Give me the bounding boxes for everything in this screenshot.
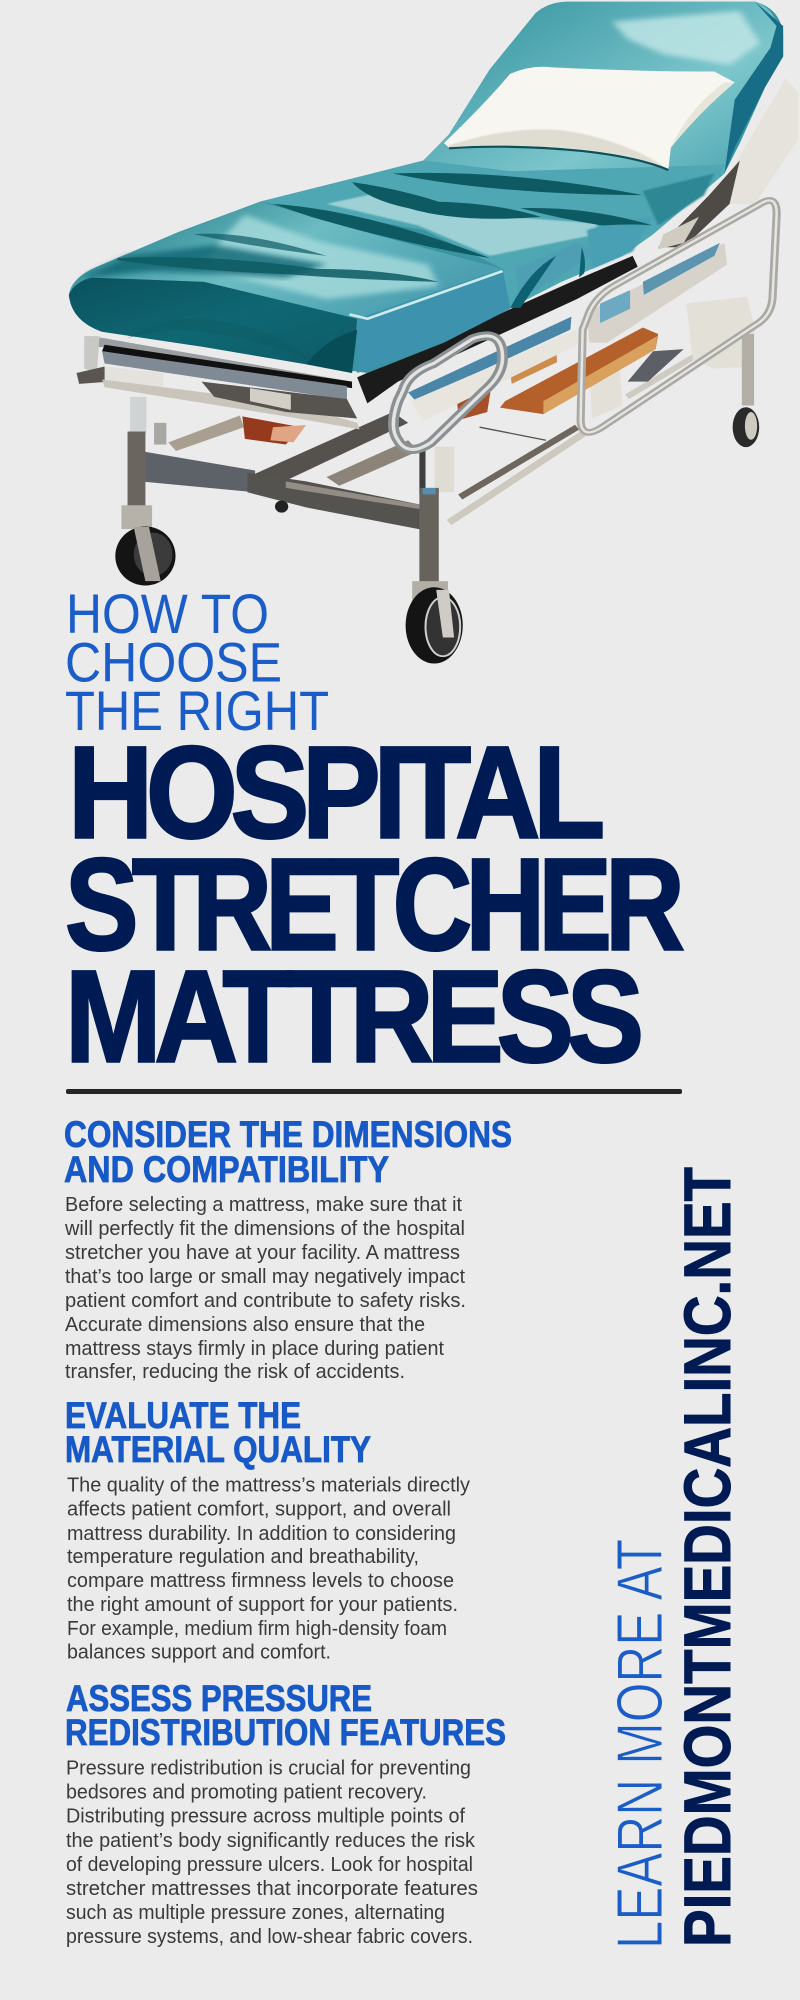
section: consider the dimensions xyxy=(64,1114,512,1383)
title: hospital stretcher mattress xyxy=(65,718,683,1090)
mattress foot front face xyxy=(69,278,357,373)
title: hospital stretcher mattress: MATTRESS xyxy=(65,942,640,1090)
mattress base silhouette xyxy=(69,2,783,373)
mattress folds xyxy=(117,173,653,373)
mattress foot highlight xyxy=(199,215,439,299)
title: how to choose the right: THE RIGHT xyxy=(65,679,329,742)
body text: assess pressure redistribution: Pressure redistribution is crucial for preventing xyxy=(66,1758,471,1780)
divider line xyxy=(66,1089,682,1094)
body text: consider the dimensions: Before selecting a mattress, make sure that it xyxy=(65,1194,462,1216)
body text: evaluate the material quality: temperature regulation and breathability, xyxy=(67,1546,419,1568)
body text: consider the dimensions: Accurate dimensions also ensure that the xyxy=(65,1314,425,1336)
body text: assess pressure redistribution: stretcher mattresses that incorporate features xyxy=(66,1878,478,1900)
heading: assess pressure redistribution xyxy=(65,1678,506,1753)
heading: consider the dimensions: CONSIDER THE DIMENSIONS xyxy=(64,1114,512,1155)
wooden support blocks xyxy=(242,327,658,445)
body text: consider the dimensions xyxy=(64,1194,466,1383)
vertical call to action: learn more at: LEARN MORE AT xyxy=(603,1539,676,1949)
mattress head side edge xyxy=(724,2,783,173)
heading: evaluate the material quality xyxy=(65,1395,371,1470)
body text: assess pressure redistribution: pressure systems, and low-shear fabric covers. xyxy=(66,1926,473,1948)
heading: consider the dimensions xyxy=(64,1114,512,1190)
section: evaluate the material quality xyxy=(65,1395,470,1664)
body text: assess pressure redistribution: such as multiple pressure zones, alternating xyxy=(66,1902,445,1924)
deck rails under mattress xyxy=(77,78,798,429)
heading: consider the dimensions: AND COMPATIBILITY xyxy=(64,1149,389,1190)
body text: evaluate the material quality: mattress durability. In addition to considering xyxy=(67,1523,456,1545)
section: assess pressure redistribution xyxy=(65,1678,506,1948)
front left leg and wheel xyxy=(115,397,176,585)
body text: evaluate the material quality: The quality of the mattress’s materials directly xyxy=(67,1474,470,1496)
body text: consider the dimensions: stretcher you have at your facility. A mattress xyxy=(65,1242,460,1264)
body text: consider the dimensions: transfer, reducing the risk of accidents. xyxy=(65,1361,405,1383)
stretcher base frame and beams xyxy=(140,297,755,530)
front centre leg and wheel xyxy=(406,447,463,664)
body text: assess pressure redistribution: of developing pressure ulcers. Look for hospital xyxy=(66,1854,473,1876)
body text: evaluate the material quality: For example, medium firm high-density foam xyxy=(67,1618,447,1640)
vertical call to action: website: PIEDMONTMEDICALINC.NET xyxy=(670,1167,744,1947)
body text: evaluate the material quality: the right amount of support for your patients. xyxy=(67,1594,458,1616)
heading: evaluate the material quality: EVALUATE THE xyxy=(65,1395,301,1436)
title: hospital stretcher mattress: STRETCHER xyxy=(65,830,683,978)
mattress middle section xyxy=(260,160,724,308)
mattress edge highlight xyxy=(349,271,503,319)
title: how to choose the right xyxy=(65,582,329,742)
body text: consider the dimensions: that’s too large or small may negatively impact xyxy=(65,1266,465,1288)
mattress foot dark shading xyxy=(82,245,327,278)
title: how to choose the right: CHOOSE xyxy=(65,630,282,694)
mattress middle highlights xyxy=(327,173,714,299)
body text: assess pressure redistribution: Distributing pressure across multiple points of xyxy=(66,1806,465,1828)
rear side guard rail xyxy=(581,200,777,432)
heading: assess pressure redistribution: ASSESS PRESSURE xyxy=(66,1678,372,1719)
front side guard rail xyxy=(393,336,503,449)
heading: evaluate the material quality: MATERIAL QUALITY xyxy=(65,1429,371,1470)
body text: evaluate the material quality: balances support and comfort. xyxy=(67,1642,331,1664)
body text: assess pressure redistribution xyxy=(66,1758,478,1948)
illustration: hospital stretcher xyxy=(69,2,798,664)
body text: assess pressure redistribution: the patient’s body significantly reduces the risk xyxy=(66,1830,476,1852)
mattress side face xyxy=(357,269,510,373)
body text: evaluate the material quality: affects patient comfort, support, and overall xyxy=(67,1498,451,1520)
mattress head highlight xyxy=(612,11,760,65)
body text: consider the dimensions: will perfectly fit the dimensions of the hospital xyxy=(64,1218,465,1240)
rear leg and wheel xyxy=(733,334,759,447)
body text: consider the dimensions: mattress stays firmly in place during patient xyxy=(65,1338,444,1360)
pillow xyxy=(444,67,735,170)
body text: consider the dimensions: patient comfort and contribute to safety risks. xyxy=(65,1290,466,1312)
mattress foot top surface xyxy=(69,202,503,319)
body text: assess pressure redistribution: bedsores and promoting patient recovery. xyxy=(66,1782,427,1804)
mattress head section xyxy=(423,2,778,204)
heading: assess pressure redistribution: REDISTRIBUTION FEATURES xyxy=(65,1712,506,1753)
title: hospital stretcher mattress: HOSPITAL xyxy=(68,718,602,866)
body text: evaluate the material quality: compare mattress firmness levels to choose xyxy=(67,1570,454,1592)
body text: evaluate the material quality xyxy=(67,1474,470,1664)
title: how to choose the right: HOW TO xyxy=(66,582,269,645)
